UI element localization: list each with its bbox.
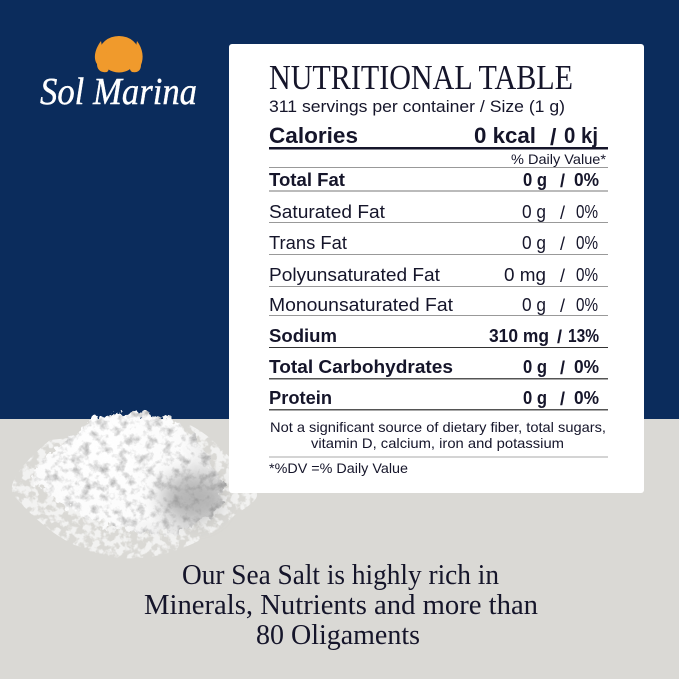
row: trans fat: / (560, 234, 565, 254)
row: total fat (269, 170, 608, 192)
row: sodium: Sodium (269, 326, 337, 346)
row: protein: / (560, 389, 565, 409)
row: saturated fat: Saturated Fat (269, 202, 385, 222)
row: total fat: 0% (574, 170, 599, 190)
calories row: 0 kcal (474, 123, 536, 148)
grey background (0, 419, 679, 679)
calories row: 0 kj (564, 123, 598, 148)
footnote (270, 419, 606, 451)
calories row: / (550, 124, 557, 150)
heading: NUTRITIONAL TABLE (269, 58, 573, 97)
daily value header: % Daily Value* (511, 151, 607, 167)
row: trans fat (269, 233, 608, 255)
salt core (32, 413, 223, 534)
navy background (0, 0, 679, 419)
footnote: Not a significant source of dietary fiber, total sugars, (270, 419, 606, 435)
salt shadow (160, 473, 220, 521)
row: total fat: / (560, 171, 565, 191)
row: polyunsaturated fat: / (560, 266, 565, 286)
row: total carbohydrates: 0 g (523, 357, 547, 377)
footnote: vitamin D, calcium, iron and potassium (311, 435, 564, 451)
row: total carbohydrates: / (560, 358, 565, 378)
bottom statement: 80 Oligaments (256, 619, 420, 651)
calories row: Calories (269, 123, 358, 148)
row: protein: Protein (269, 388, 332, 408)
icon: orange roast chicken (95, 36, 143, 72)
row: saturated fat: / (560, 203, 565, 223)
row: saturated fat: 0 g (522, 202, 546, 222)
logo: Sol Marina (40, 36, 197, 113)
bottom statement: Minerals, Nutrients and more than (144, 589, 538, 621)
row: polyunsaturated fat: 0% (576, 265, 598, 285)
row: total carbohydrates (269, 357, 608, 380)
row: total fat: Total Fat (269, 170, 345, 190)
daily value note: *%DV =% Daily Value (269, 460, 408, 476)
row: total carbohydrates: Total Carbohydrates (269, 357, 453, 377)
row: total carbohydrates: 0% (574, 357, 599, 377)
logo wordmark: Sol Marina (40, 71, 197, 113)
row: sodium: / (557, 327, 562, 347)
serving size: 311 servings per container / Size (1 g) (269, 97, 565, 116)
bottom statement: Our Sea Salt is highly rich in (182, 559, 499, 591)
sea salt pile (12, 413, 257, 558)
row: trans fat: 0 g (522, 233, 546, 253)
row: total fat: 0 g (523, 170, 547, 190)
scattered outer salt (12, 425, 257, 558)
calories row (269, 123, 608, 150)
nutrition card (229, 44, 644, 493)
row: polyunsaturated fat (269, 265, 608, 287)
row: protein: 0 g (523, 388, 547, 408)
row: monounsaturated fat: 0 g (522, 295, 546, 315)
bottom statement (144, 559, 538, 651)
row: sodium (269, 326, 608, 348)
row: protein: 0% (574, 388, 599, 408)
row: monounsaturated fat: 0% (576, 295, 598, 315)
row: polyunsaturated fat: Polyunsaturated Fat (269, 265, 440, 285)
row: trans fat: Trans Fat (269, 233, 347, 253)
row: sodium: 13% (568, 326, 599, 346)
row: saturated fat: 0% (576, 202, 598, 222)
row: polyunsaturated fat: 0 mg (504, 265, 546, 285)
row: trans fat: 0% (576, 233, 598, 253)
row: monounsaturated fat: Monounsaturated Fat (269, 295, 453, 315)
row: monounsaturated fat (269, 295, 608, 316)
row: protein (269, 388, 608, 410)
row: monounsaturated fat: / (560, 296, 565, 316)
row: sodium: 310 mg (489, 326, 549, 346)
row: saturated fat (269, 202, 608, 223)
